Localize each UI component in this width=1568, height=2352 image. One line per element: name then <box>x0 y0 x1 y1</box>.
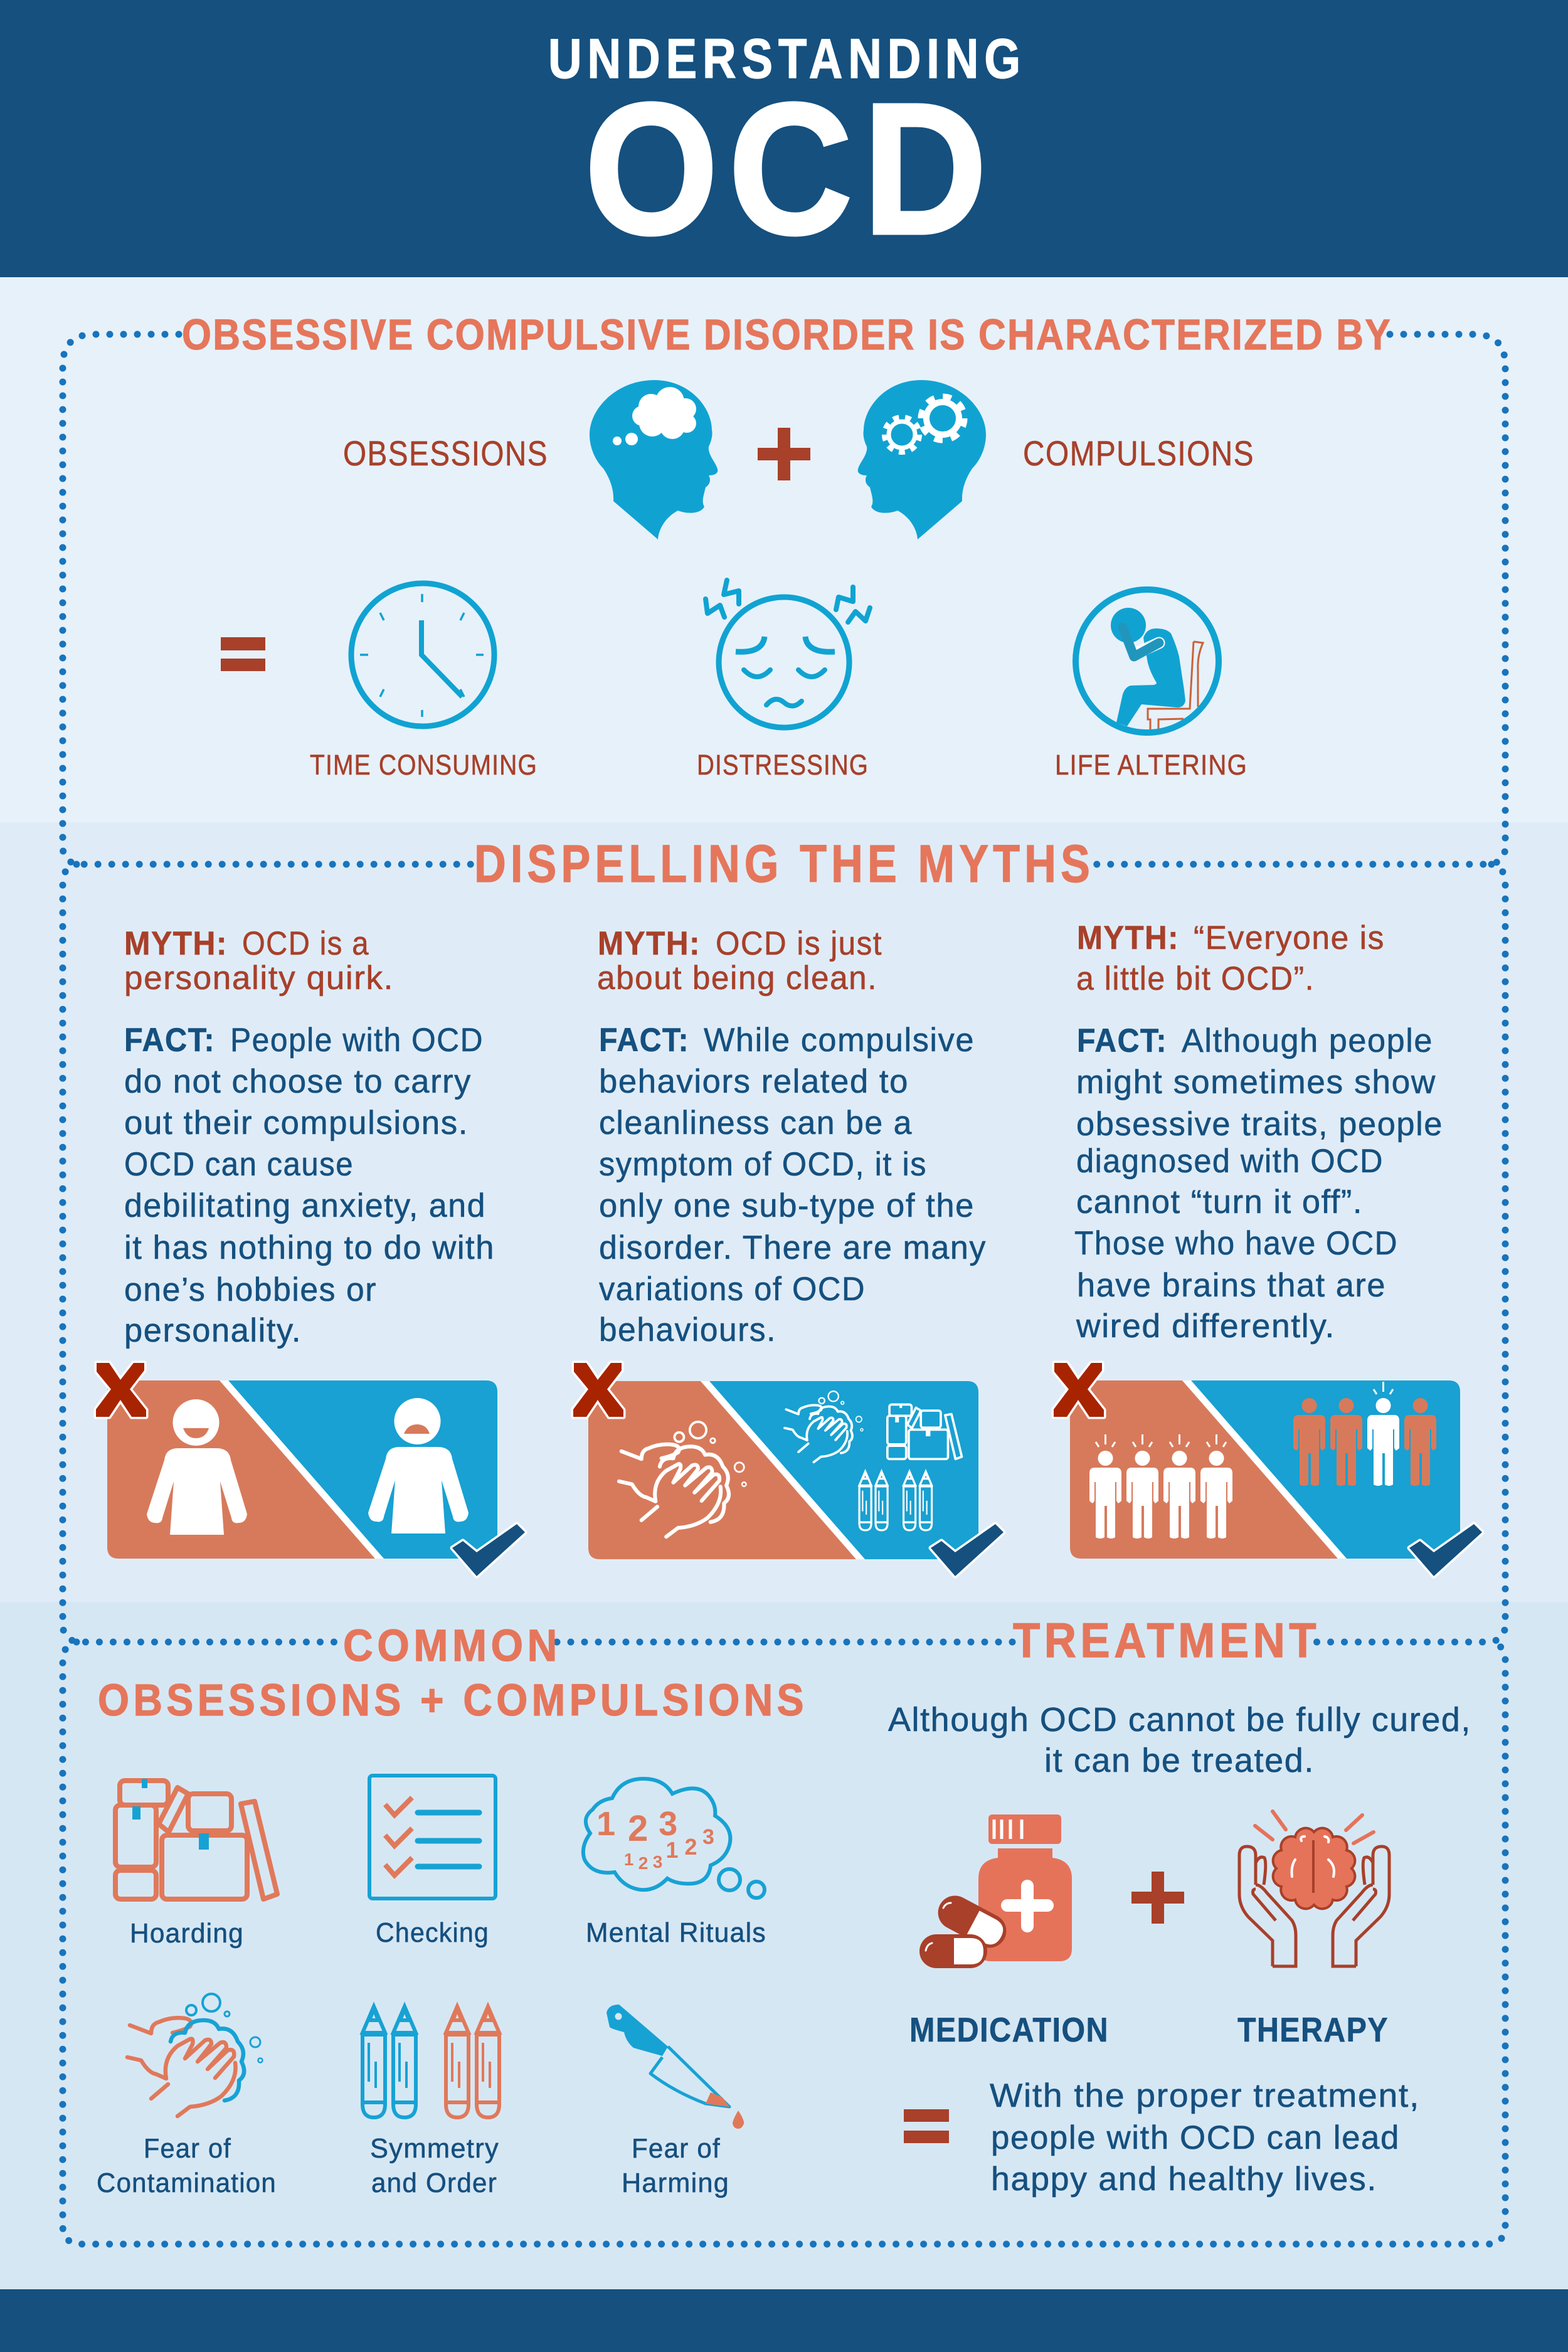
label: time consuming: TIME CONSUMING <box>310 749 538 781</box>
column: myth 3 text: wired differently. <box>1076 1308 1335 1345</box>
icon: hoarding boxes <box>115 1779 277 1899</box>
heading: treatment: TREATMENT <box>1013 1613 1320 1668</box>
label: symmetry and order <box>370 2133 499 2198</box>
column: myth 1 text: personality quirk. <box>124 960 394 997</box>
label: life altering: LIFE ALTERING <box>1055 749 1248 781</box>
column: myth 3 text: Those who have OCD <box>1074 1225 1398 1262</box>
column: myth 3 text: might sometimes show <box>1076 1064 1436 1101</box>
column: myth 3 text: a little bit OCD”. <box>1076 960 1315 997</box>
column: myth 2 text: FACT: <box>599 1022 689 1059</box>
icon: thought cloud with numbers: 2 <box>638 1853 649 1873</box>
panel: dispelling the myths <box>96 834 1482 1576</box>
icon: pencils, small <box>859 1471 932 1530</box>
heading: common: COMMON <box>343 1621 561 1671</box>
icon: head with thought cloud <box>590 380 718 539</box>
column: myth 1 text: FACT: <box>124 1022 215 1059</box>
icon: clock <box>351 583 494 726</box>
title: understanding: UNDERSTANDING <box>548 27 1026 90</box>
column: myth 1 text <box>124 925 495 1349</box>
column: myth 2 text: symptom of OCD, it is <box>599 1146 927 1183</box>
icon: thought cloud with numbers: 3 <box>653 1852 663 1872</box>
title: OCD: OCD <box>585 65 997 273</box>
column: myth 2 text <box>597 925 987 1348</box>
column: myth 2 text: OCD is just <box>716 925 882 962</box>
column: myth 3 text: FACT: <box>1077 1022 1167 1059</box>
label: fear of contamination: Contamination <box>97 2168 277 2198</box>
label: compulsions: COMPULSIONS <box>1023 433 1254 473</box>
icon: distressed face <box>706 580 870 728</box>
text: treatment outcome: people with OCD can lead <box>991 2119 1400 2156</box>
text: treatment outcome: happy and healthy lives. <box>991 2161 1377 2198</box>
column: myth 1 text: OCD can cause <box>124 1146 354 1183</box>
label: medication: MEDICATION <box>909 2010 1109 2049</box>
label: mental rituals: Mental Rituals <box>586 1917 766 1948</box>
icon: equals <box>221 637 265 671</box>
column: myth 3 text: have brains that are <box>1077 1267 1386 1304</box>
column: myth 2 text: cleanliness can be a <box>599 1104 913 1142</box>
label: fear of harming: Fear of <box>632 2133 721 2164</box>
icon: thought cloud with numbers: 1 <box>596 1805 617 1843</box>
panel: characterized by <box>182 310 1392 781</box>
label: therapy: THERAPY <box>1237 2010 1389 2049</box>
column: myth 1 text: do not choose to carry <box>124 1063 472 1100</box>
column: myth 1 text: People with OCD <box>230 1022 484 1059</box>
column: myth 3 text: Although people <box>1182 1022 1433 1059</box>
icon: boxes, small <box>887 1404 962 1459</box>
text: cannot be cured <box>888 1701 1471 1779</box>
text: treatment outcome <box>990 2077 1420 2198</box>
footer band <box>0 2289 1568 2352</box>
icon: washing hands, small <box>785 1391 863 1462</box>
heading: obsessions + compulsions: OBSESSIONS + COMPULSIONS <box>98 1676 808 1725</box>
column: myth 1 text: OCD is a <box>242 925 369 962</box>
column: myth 2 text: disorder. There are many <box>599 1229 987 1266</box>
label: fear of contamination: Fear of <box>144 2133 231 2164</box>
column: myth 2 text: behaviours. <box>599 1311 776 1348</box>
header band <box>0 0 1568 277</box>
label: symmetry and order: and Order <box>371 2168 497 2198</box>
label: checking: Checking <box>376 1917 489 1948</box>
column: myth 3 text: MYTH: <box>1077 919 1179 956</box>
card: clean hands <box>573 1363 1004 1576</box>
label: symmetry and order: Symmetry <box>370 2133 499 2164</box>
icon: thought cloud with numbers: 1 <box>624 1850 634 1869</box>
column: myth 2 text: behaviors related to <box>599 1063 909 1100</box>
icon: person in chair <box>1076 590 1219 733</box>
label: hoarding: Hoarding <box>130 1918 244 1949</box>
icon: medicine bottle and capsules <box>919 1814 1072 1968</box>
icon: four white people <box>1089 1434 1232 1539</box>
icon: washing hands, large <box>619 1422 746 1537</box>
card: everyone <box>1054 1363 1482 1576</box>
icon: plus <box>758 428 810 480</box>
column: myth 1 text: one’s hobbies or <box>124 1271 377 1308</box>
column: myth 3 text: “Everyone is <box>1194 919 1385 956</box>
column: myth 3 text: diagnosed with OCD <box>1076 1143 1384 1180</box>
icon: hands holding brain <box>1239 1811 1389 1966</box>
column: myth 2 text: variations of OCD <box>599 1271 866 1308</box>
column: myth 3 text <box>1074 919 1443 1345</box>
icon: thought cloud with numbers: 2 <box>684 1834 698 1860</box>
card: personality quirk <box>96 1363 525 1576</box>
icon: head with gears <box>858 380 986 539</box>
column: myth 1 text: out their compulsions. <box>124 1104 469 1142</box>
icon: thought cloud with numbers: 2 <box>628 1808 649 1849</box>
column: myth 1 text: MYTH: <box>124 925 228 962</box>
icon: thought cloud with numbers: 3 <box>702 1825 715 1849</box>
icon: plus <box>1131 1872 1184 1924</box>
label: fear of harming <box>622 2133 729 2198</box>
heading: dispelling the myths: DISPELLING THE MYTHS <box>474 834 1094 893</box>
icon: knife <box>607 2005 744 2129</box>
text: treatment outcome: With the proper treatment, <box>990 2077 1420 2114</box>
label: fear of harming: Harming <box>622 2168 729 2198</box>
column: myth 1 text: debilitating anxiety, and <box>124 1187 486 1224</box>
icon: happy person <box>147 1399 247 1535</box>
column: myth 1 text: personality. <box>124 1312 302 1349</box>
heading: characterized by: OBSESSIVE COMPULSIVE DISORDER IS CHARACTERIZED BY <box>182 310 1392 359</box>
icon: washing hands <box>127 1994 262 2116</box>
column: myth 1 text: it has nothing to do with <box>124 1229 495 1266</box>
panel: common obsessions and compulsions <box>97 1621 808 2198</box>
text: cannot be cured: Although OCD cannot be fully cured, <box>888 1701 1471 1739</box>
label: fear of contamination <box>97 2133 277 2198</box>
icon: one white among orange people <box>1293 1382 1436 1486</box>
label: distressing: DISTRESSING <box>697 749 869 781</box>
dotted section frames <box>63 334 1505 2244</box>
column: myth 3 text: obsessive traits, people <box>1076 1106 1443 1143</box>
panel: treatment <box>888 1613 1471 2198</box>
icon: pencils <box>363 2006 499 2117</box>
icon: equals <box>904 2109 949 2143</box>
text: cannot be cured: it can be treated. <box>1044 1742 1315 1779</box>
icon: thought cloud with numbers: 3 <box>659 1805 679 1843</box>
column: myth 2 text: about being clean. <box>597 960 877 997</box>
column: myth 2 text: While compulsive <box>704 1022 975 1059</box>
icon: thought cloud with numbers <box>583 1779 765 1898</box>
label: obsessions: OBSESSIONS <box>343 433 548 473</box>
column: myth 2 text: MYTH: <box>598 925 701 962</box>
icon: checklist <box>369 1776 495 1899</box>
icon: sad person <box>368 1398 469 1534</box>
icon: thought cloud with numbers: 1 <box>665 1837 679 1863</box>
column: myth 3 text: cannot “turn it off”. <box>1076 1184 1363 1221</box>
column: myth 2 text: only one sub-type of the <box>599 1187 975 1224</box>
